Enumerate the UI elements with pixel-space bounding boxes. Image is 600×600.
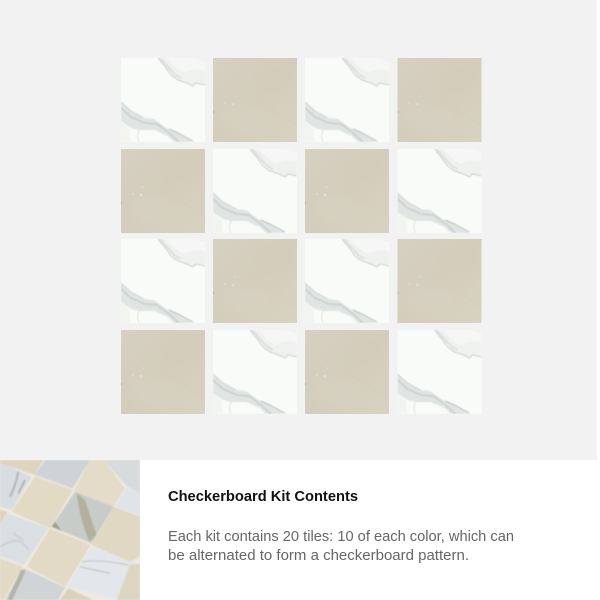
installed floor photo (0, 460, 140, 600)
heading: Checkerboard Kit Contents (168, 489, 358, 505)
page background (0, 0, 597, 460)
description: Each kit contains 20 tiles: 10 of each color, which can (168, 529, 514, 545)
marble diamonds (0, 460, 140, 600)
row 4 tiles (121, 330, 482, 414)
text block (168, 489, 514, 564)
description (168, 529, 514, 564)
row 2 tiles (121, 149, 482, 233)
description: be alternated to form a checkerboard pattern. (168, 548, 469, 564)
row 1 tiles (121, 58, 482, 142)
tile grid: 4 by 4 checkerboard (121, 58, 482, 414)
row 3 tiles (121, 239, 482, 323)
beige diamonds (0, 460, 140, 600)
